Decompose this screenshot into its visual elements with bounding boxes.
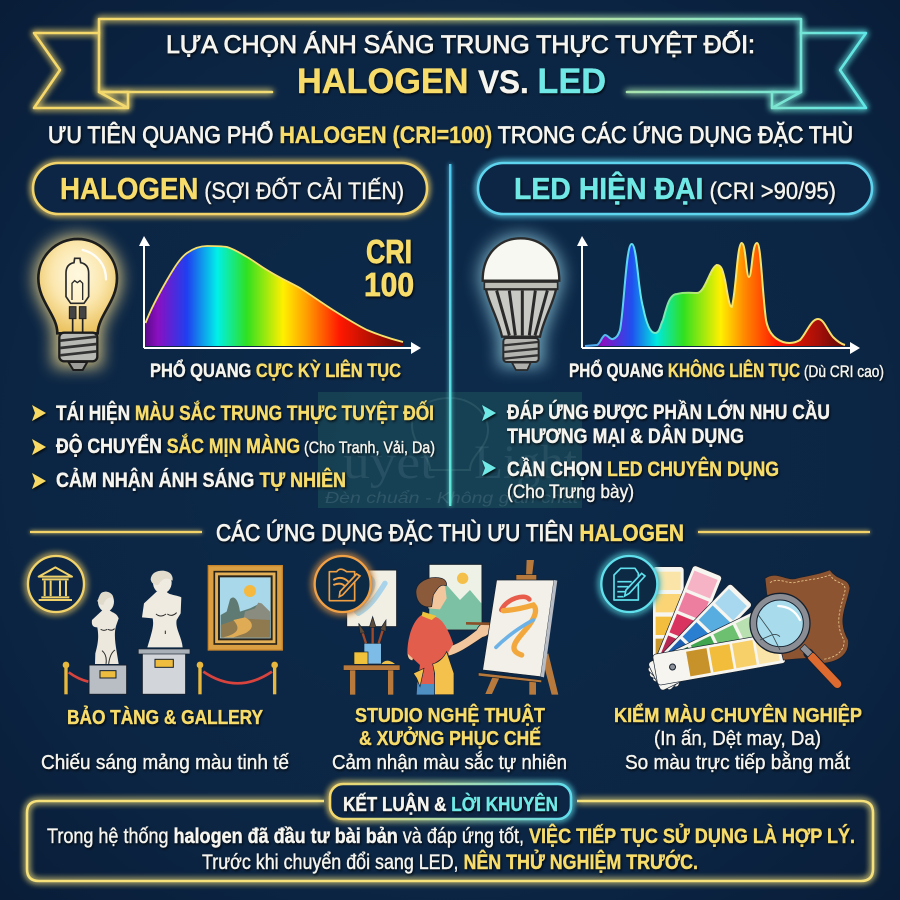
easel and canvas [478, 560, 558, 695]
halogen bullet list: ĐỘ CHUYỂN SẮC MỊN MÀNG (Cho Tranh, Vải, Da) [56, 434, 435, 458]
chart: LED discontinuous spectrum [577, 236, 860, 354]
illustration: museum and gallery [28, 556, 282, 694]
leather sample [765, 570, 850, 663]
inspection caption: (In ấn, Dệt may, Da) [654, 728, 821, 750]
divider [449, 164, 451, 506]
panel: conclusion: Trong hệ thống halogen đã đầu tư bài bản và đáp ứng tốt, VIỆC TIẾP TỤC SỬ DỤNG LÀ HỢP LÝ. [47, 824, 855, 848]
title: LỰA CHỌN ÁNH SÁNG TRUNG THỰC TUYỆT ĐỐI: [166, 29, 755, 59]
applications heading: CÁC ỨNG DỤNG ĐẶC THÙ ƯU TIÊN HALOGEN [216, 520, 684, 547]
studio caption: STUDIO NGHỆ THUẬT [355, 703, 545, 727]
rope barrier [63, 662, 278, 694]
panel: halogen header pill [33, 163, 427, 214]
magnifying glass [750, 593, 837, 684]
LED bullet list: (Cho Trưng bày) [507, 482, 634, 503]
LED bullet list: CẦN CHỌN LED CHUYÊN DỤNG [507, 457, 779, 481]
LED spectrum caption: PHỔ QUANG KHÔNG LIÊN TỤC (Dù CRI cao) [569, 360, 884, 382]
framed painting [208, 566, 282, 650]
illustration: color inspection [601, 556, 850, 691]
CRI 100 label [364, 233, 414, 303]
museum caption: Chiếu sáng mảng màu tinh tế [41, 752, 289, 774]
title: HALOGEN VS. LED [297, 62, 606, 101]
inspection caption [614, 703, 862, 774]
icon: halogen bulb [38, 239, 117, 370]
panel: LED header pill [478, 163, 872, 214]
paintings on wall [347, 564, 482, 630]
watermark panel: uyet [343, 436, 436, 489]
halogen spectrum caption: PHỔ QUANG CỰC KỲ LIÊN TỤC [150, 360, 401, 382]
icon: document [601, 556, 657, 612]
icon: museum temple [28, 556, 84, 612]
title ribbon banner [34, 19, 866, 108]
LED bullet list [482, 400, 830, 503]
halogen bullet list: CẢM NHẬN ÁNH SÁNG TỰ NHIÊN [56, 468, 346, 492]
icon: LED bulb [483, 238, 559, 370]
illustration: art studio [315, 556, 558, 695]
LED bullet list: THƯƠNG MẠI & DÂN DỤNG [507, 424, 744, 448]
table with brushes [343, 617, 400, 695]
small statue on pedestal [89, 592, 127, 694]
icon: clipboard [315, 556, 371, 612]
swatch fan [647, 565, 786, 691]
halogen bullet list [32, 401, 435, 492]
panel: halogen header pill: HALOGEN (SỢI ĐỐT CẢI TIẾN) [60, 171, 404, 206]
studio caption: & XƯỞNG PHỤC CHẾ [359, 726, 541, 750]
painter figure [407, 577, 510, 695]
subtitle: ƯU TIÊN QUANG PHỔ HALOGEN (CRI=100) TRONG CÁC ỨNG DỤNG ĐẶC THÙ [48, 121, 853, 149]
chart: halogen continuous spectrum [139, 236, 421, 354]
watermark panel [318, 392, 582, 508]
inspection caption: So màu trực tiếp bằng mắt [625, 751, 850, 774]
LED bullet list: ĐÁP ỨNG ĐƯỢC PHẦN LỚN NHU CẦU [507, 400, 830, 424]
panel: conclusion: Trước khi chuyển đổi sang LED, NÊN THỬ NGHIỆM TRƯỚC. [202, 850, 698, 874]
watermark panel: Light [474, 436, 578, 489]
panel: conclusion [27, 784, 873, 881]
CRI 100 label: CRI [366, 233, 412, 270]
inspection caption: KIỂM MÀU CHUYÊN NGHIỆP [614, 703, 862, 727]
studio caption: Cảm nhận màu sắc tự nhiên [332, 751, 567, 774]
CRI 100 label: 100 [364, 266, 414, 303]
halogen bullet list: TÁI HIỆN MÀU SẮC TRUNG THỰC TUYỆT ĐỐI [56, 401, 434, 425]
studio caption [332, 703, 567, 774]
panel: LED header pill: LED HIỆN ĐẠI (CRI >90/95) [514, 170, 836, 206]
large statue on pedestal [138, 571, 190, 694]
title [166, 29, 755, 101]
museum caption [41, 706, 289, 774]
panel: conclusion: KẾT LUẬN & LỜI KHUYÊN [343, 792, 558, 816]
watermark panel: Đèn chuẩn - Không gian chất [325, 489, 579, 507]
museum caption: BẢO TÀNG & GALLERY [67, 706, 264, 729]
